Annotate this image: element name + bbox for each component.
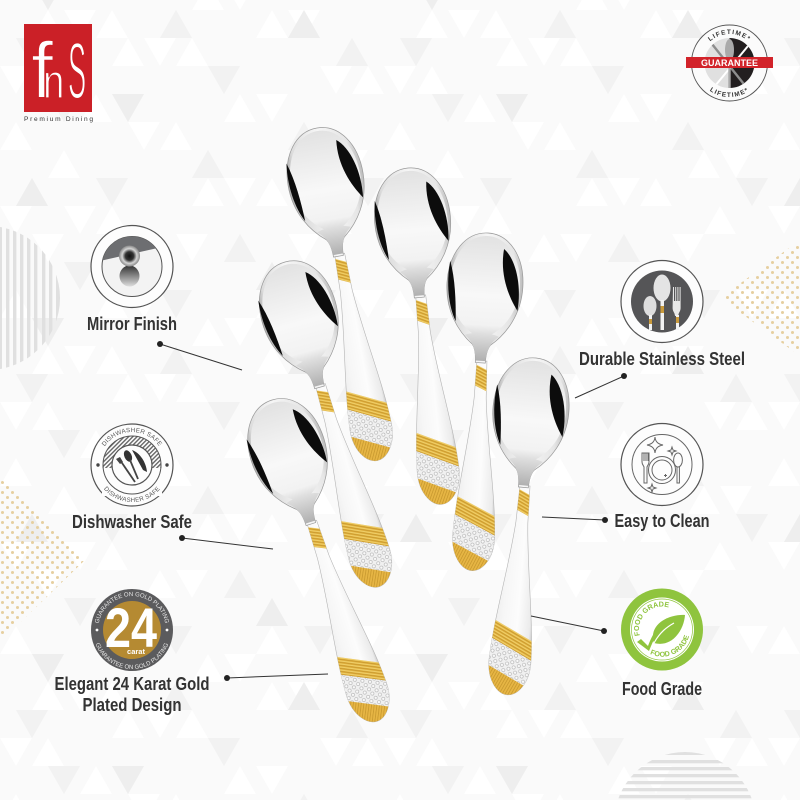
lifetime guarantee badge: LIFETIME* — [708, 30, 750, 42]
decorative gold dot diamond right — [720, 240, 800, 356]
leader: Durable Stainless Steel — [575, 373, 627, 398]
icon: 24 carat gold: GUARANTEE ON GOLD PLATING — [95, 592, 169, 623]
leader: Dishwasher Safe — [179, 535, 273, 549]
icon: 24 carat gold: 24 — [105, 596, 157, 659]
decorative striped half circle left — [0, 227, 60, 369]
decorative striped half circle bottom — [618, 752, 752, 798]
spoon 4 — [248, 252, 415, 610]
spoon 6 — [464, 354, 574, 710]
icon: mirror finish — [91, 226, 173, 308]
icon: dishwasher safe — [90, 423, 174, 507]
spoon 2 — [370, 165, 476, 520]
logo: FnS Premium Dining: n — [43, 56, 64, 109]
decorative gold dot diamond left — [0, 478, 85, 642]
leader: Easy to Clean — [542, 517, 608, 523]
logo: FnS Premium Dining: S — [68, 26, 86, 115]
spoon 3 — [429, 231, 526, 585]
leader: 24 Karat Gold — [224, 674, 328, 681]
label: Mirror Finish: Mirror Finish — [87, 314, 177, 334]
label: Easy to Clean: Easy to Clean — [614, 511, 710, 531]
label: Dishwasher Safe: Dishwasher Safe — [72, 512, 192, 532]
icon: dishwasher safe: DISHWASHER SAFE — [102, 428, 162, 446]
spoon 5 — [236, 389, 413, 745]
logo: FnS Premium Dining: f — [31, 26, 54, 115]
icon: dishwasher safe: DISHWASHER SAFE — [104, 486, 160, 502]
icon: durable stainless steel — [621, 260, 703, 342]
leader: Mirror Finish — [157, 341, 242, 370]
icon: 24 carat gold: carat — [127, 647, 145, 656]
icon: 24 carat gold — [91, 589, 173, 671]
icon: easy to clean — [621, 424, 703, 506]
leader: Food Grade — [531, 616, 607, 634]
icon: food grade — [621, 588, 703, 670]
lifetime guarantee badge — [686, 24, 773, 102]
label: Food Grade: Food Grade — [622, 679, 702, 699]
icon: 24 carat gold: GUARANTEE ON GOLD PLATING — [96, 643, 168, 669]
logo: FnS Premium Dining: Premium Dining — [24, 116, 93, 123]
lifetime guarantee badge: GUARANTEE — [701, 58, 758, 69]
icon: food grade: FOOD GRADE — [650, 634, 689, 657]
label: Elegant 24 Karat Gold Plated Design: Plated Design — [82, 695, 182, 715]
lifetime guarantee badge: LIFETIME* — [710, 87, 747, 97]
label: Durable Stainless Steel: Durable Stainless Steel — [579, 349, 745, 369]
icon: food grade: FOOD GRADE — [634, 602, 670, 636]
logo: FnS Premium Dining — [24, 24, 93, 123]
label: Elegant 24 Karat Gold Plated Design: Elegant 24 Karat Gold — [54, 674, 210, 694]
spoon 1 — [280, 122, 412, 479]
